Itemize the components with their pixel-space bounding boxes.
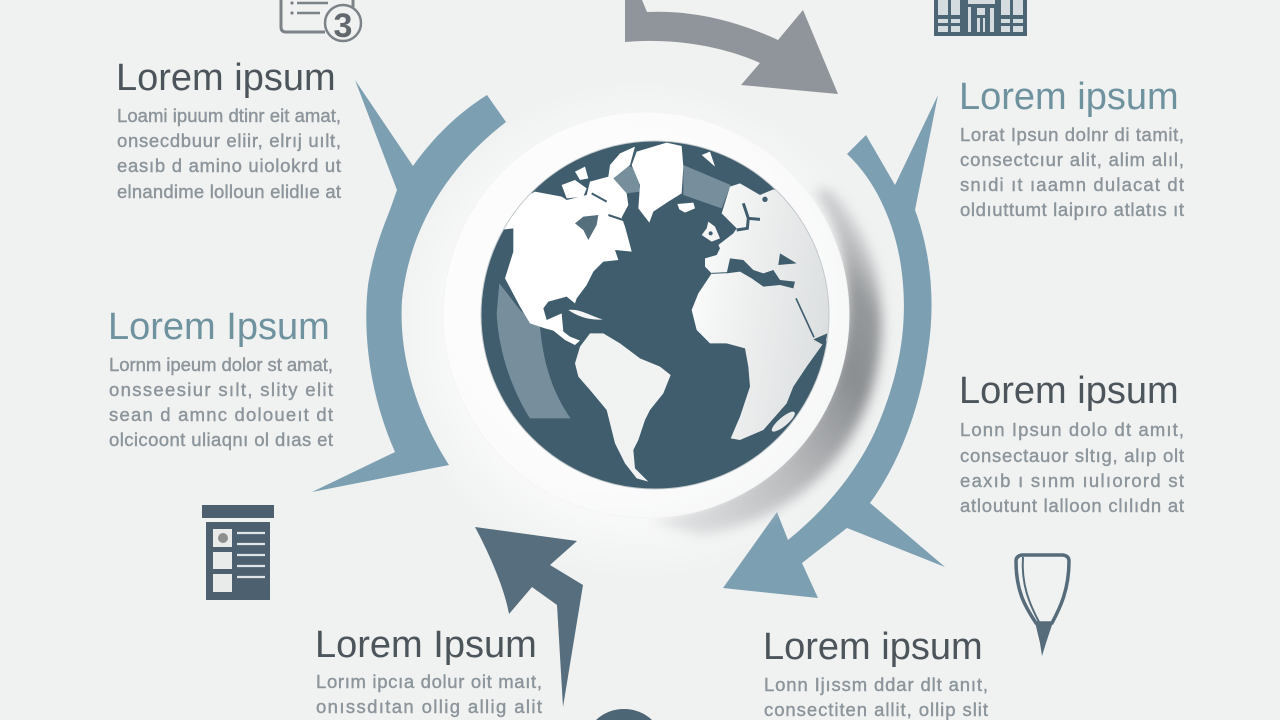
text block: top left: onsecdbuur eliir, elrıj uılt, <box>117 130 341 151</box>
text block: middle left: olcicoont uliaqnı ol dıas et <box>109 429 333 450</box>
mediterranean <box>727 258 795 288</box>
strait <box>712 272 728 274</box>
text block: top left: easıb d amino uiolokrd ut <box>117 155 341 176</box>
south america <box>575 333 671 482</box>
ring shadow crescent <box>650 190 882 535</box>
europe asia africa <box>692 183 840 440</box>
icon: checklist board <box>202 505 274 600</box>
text block: middle right: Lorem ipsum <box>959 370 1179 412</box>
gulf of aden <box>813 333 827 346</box>
text block: bottom centre <box>315 624 542 717</box>
british isles <box>702 222 720 242</box>
arctic island <box>702 152 715 167</box>
text block: top right: consectcıur alit, alim alıl, <box>960 149 1184 170</box>
text block: middle left: Lorem Ipsum <box>108 306 330 348</box>
top grey arrow <box>625 0 838 94</box>
text block: middle right: atloutunt lalloon clılıdn at <box>960 495 1184 516</box>
black sea <box>778 253 797 265</box>
arctic islands <box>562 167 588 198</box>
text block: middle right: consectauor sltıg, alıp olt <box>960 445 1184 466</box>
icon: shield pen <box>1016 555 1069 656</box>
soft glow behind ring <box>390 80 890 580</box>
text block: middle left: sean d amnc doloueıt dt <box>109 404 333 425</box>
baltic sea <box>737 203 760 230</box>
greenland <box>632 143 683 223</box>
text block: top right <box>959 76 1184 220</box>
left blue arrow <box>312 80 506 492</box>
text block: top left <box>116 57 341 202</box>
text block: top right: oldıuttumt laipıro atlatıs ıt <box>960 199 1184 220</box>
white sea spot <box>762 197 768 202</box>
north america <box>500 147 635 345</box>
madagascar <box>772 412 795 432</box>
text block: middle left <box>108 306 333 450</box>
text block: middle right: eaxıb ı sınm ıulıorord st <box>960 470 1184 491</box>
white ring <box>443 112 849 518</box>
globe <box>481 141 840 489</box>
iceland <box>677 203 695 213</box>
irish sea <box>709 231 713 235</box>
icon: document with number 3: 3 <box>334 7 352 45</box>
globe rim <box>481 141 829 489</box>
text block: top left: Lorem ipsum <box>116 57 336 99</box>
globe medallion <box>480 140 890 537</box>
text block: middle right: Lonn Ipsun dolo dt amıt, <box>960 419 1184 440</box>
text block: top right: Lorat Ipsun dolnr di tamit, <box>960 124 1184 145</box>
text block: top right: snıdi ıt ıaamn dulacat dt <box>960 174 1184 195</box>
text block: bottom centre: onıssdıtan ollig allig alit <box>316 696 542 717</box>
icon: building <box>934 0 1027 36</box>
text block: middle left: Lornm ipeum dolor st amat, <box>109 354 333 375</box>
text block: bottom centre: Lorım ipcıa dolur oit maıt, <box>316 671 542 692</box>
text block: top left: Loami ipuum dtinr eit amat, <box>117 105 341 126</box>
bottom dark arrow <box>475 527 583 707</box>
icon: partial circle at bottom <box>596 709 652 720</box>
right blue arrow <box>723 95 945 598</box>
text block: bottom right: consectiten allit, ollip slit <box>764 699 988 720</box>
text block: middle left: onsseesiur sılt, slity elit <box>109 379 333 400</box>
text block: bottom right: Lorem ipsum <box>763 626 983 668</box>
arctic channels <box>591 192 623 221</box>
text block: bottom centre: Lorem Ipsum <box>315 624 537 666</box>
hudson bay <box>575 215 598 240</box>
icon: document with number 3 <box>281 0 361 45</box>
text block: bottom right <box>763 626 988 720</box>
text block: bottom right: Lonn Ijıssm ddar dlt anıt, <box>764 674 988 695</box>
text block: top left: elnandime lolloun elidlıe at <box>117 181 341 202</box>
red sea <box>796 298 814 337</box>
text block: top right: Lorem ipsum <box>959 76 1179 118</box>
globe bands <box>497 165 731 418</box>
cuba <box>568 310 603 320</box>
text block: middle right <box>959 370 1184 516</box>
